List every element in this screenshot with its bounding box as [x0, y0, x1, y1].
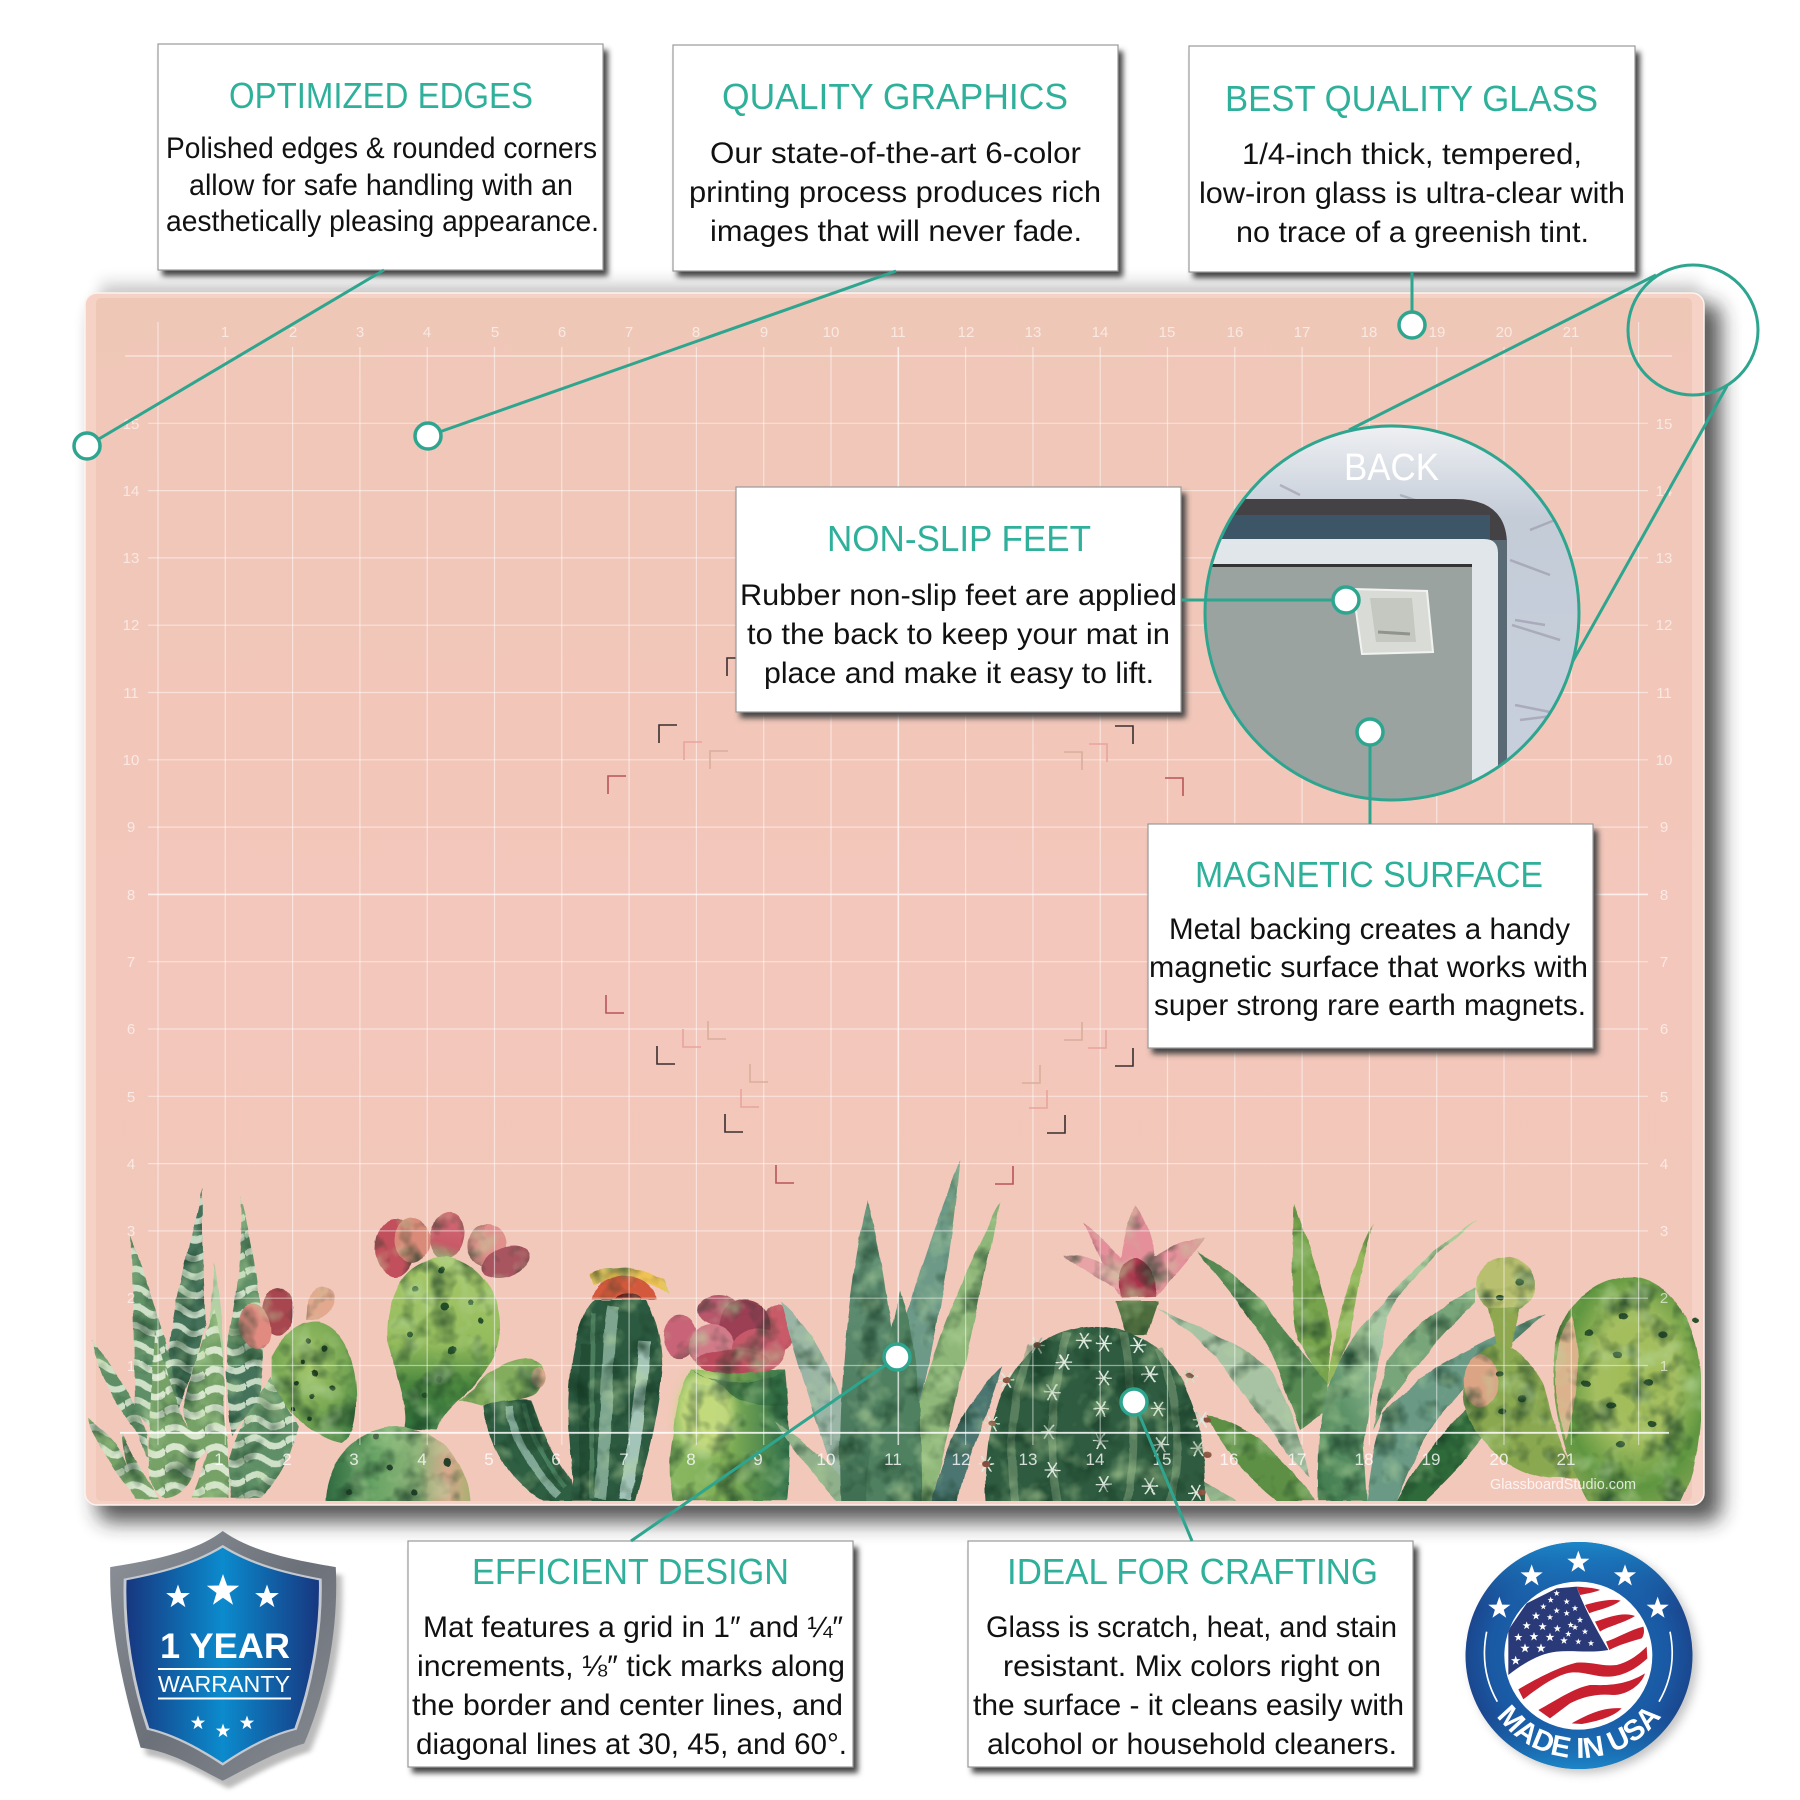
ruler numbers left: 5 — [127, 1089, 135, 1106]
ruler numbers top: 2 — [289, 324, 297, 341]
callout dot: edges — [74, 433, 100, 459]
panel: efficient design — [408, 1541, 858, 1773]
ruler numbers bottom: 16 — [1220, 1450, 1238, 1469]
ruler numbers top: 21 — [1563, 324, 1579, 341]
stars — [166, 1574, 279, 1737]
ruler numbers right: 15 — [1656, 416, 1672, 433]
magnifier connector lines — [1349, 275, 1727, 668]
white frame — [1200, 539, 1498, 810]
inset: back of the mat photo — [1200, 420, 1590, 814]
ruler numbers right: 11 — [1656, 685, 1672, 702]
body text: Glass is scratch, heat, and stain — [986, 1611, 1397, 1644]
connector lines from panels to dots — [87, 270, 1412, 1541]
aloe centre left leaves — [775, 1200, 892, 1501]
ruler numbers right — [1656, 416, 1672, 1375]
website credit: GlassboardStudio.com — [1490, 1476, 1636, 1493]
body text: Metal backing creates a handy — [1169, 913, 1570, 946]
zebra haworthia — [88, 1188, 263, 1498]
ruler numbers bottom: 5 — [484, 1450, 494, 1469]
curved cactus arm — [458, 1358, 575, 1501]
heading: EFFICIENT DESIGN — [472, 1551, 789, 1592]
ruler numbers top: 18 — [1361, 324, 1377, 341]
ruler numbers bottom: 10 — [817, 1450, 835, 1469]
body text — [1149, 913, 1588, 1022]
middle group: curved, column and pink-topped cacti — [458, 1268, 796, 1501]
right prickly pear — [1464, 1257, 1701, 1503]
ruler numbers left: 1 — [127, 1358, 135, 1375]
body text — [166, 132, 599, 238]
small prickly pear — [234, 1287, 357, 1443]
body text: allow for safe handling with an — [189, 169, 573, 202]
heading: BEST QUALITY GLASS — [1225, 78, 1598, 119]
ruler numbers top: 4 — [423, 324, 431, 341]
shield shape — [110, 1531, 336, 1781]
ruler numbers right: 4 — [1660, 1156, 1668, 1173]
ruler numbers right: 1 — [1660, 1358, 1668, 1375]
ruler numbers bottom: 18 — [1355, 1450, 1373, 1469]
ruler numbers left: 14 — [123, 483, 139, 500]
callout dot: graphics — [415, 423, 441, 449]
ruler numbers left: 9 — [127, 819, 135, 836]
ruler numbers top: 16 — [1227, 324, 1243, 341]
ruler numbers top: 17 — [1294, 324, 1310, 341]
ruler numbers bottom: 21 — [1557, 1450, 1575, 1469]
body text — [973, 1611, 1404, 1761]
clear rubber foot — [1353, 589, 1433, 654]
stars — [1488, 1551, 1669, 1618]
panel: quality graphics — [673, 45, 1123, 277]
ruler numbers top: 15 — [1159, 324, 1175, 341]
body text: diagonal lines at 30, 45, and 60°. — [416, 1728, 847, 1761]
ruler numbers right: 8 — [1660, 887, 1668, 904]
ruler numbers right: 7 — [1660, 954, 1668, 971]
ruler numbers right: 9 — [1660, 819, 1668, 836]
body text — [740, 579, 1177, 690]
body text: to the back to keep your mat in — [747, 618, 1170, 651]
body text: Mat features a grid in 1″ and ¼″ — [423, 1611, 843, 1644]
body text: Rubber non-slip feet are applied — [740, 579, 1177, 612]
lower pad — [325, 1427, 470, 1503]
ruler numbers bottom: 2 — [282, 1450, 292, 1469]
side arcs — [1484, 1632, 1672, 1702]
ruler numbers right: 5 — [1660, 1089, 1668, 1106]
heading: MAGNETIC SURFACE — [1195, 854, 1543, 895]
body text: place and make it easy to lift. — [764, 657, 1154, 690]
ruler numbers right: 13 — [1656, 550, 1672, 567]
ruler numbers right: 10 — [1656, 752, 1672, 769]
right plants — [978, 1206, 1701, 1503]
ruler numbers left: 11 — [123, 685, 139, 702]
flag and stars, drawn in crop space — [1484, 1551, 1672, 1730]
large aloe — [1157, 1203, 1546, 1502]
cactus illustration row — [88, 1160, 1701, 1503]
ruler numbers top: 3 — [356, 324, 364, 341]
pink-topped cactus — [663, 1295, 796, 1501]
ruler numbers bottom: 9 — [753, 1450, 763, 1469]
column cactus — [568, 1268, 668, 1501]
ruler numbers bottom: 20 — [1490, 1450, 1508, 1469]
body text: low-iron glass is ultra-clear with — [1199, 177, 1625, 210]
panel: optimized edges — [158, 44, 608, 276]
ruler numbers right: 6 — [1660, 1021, 1668, 1038]
ruler numbers bottom: 7 — [619, 1450, 629, 1469]
ruler numbers bottom: 8 — [686, 1450, 696, 1469]
ruler numbers top: 6 — [558, 324, 566, 341]
ruler numbers bottom: 1 — [214, 1450, 224, 1469]
magnifier ring on board corner — [1628, 265, 1758, 395]
body text — [689, 137, 1101, 248]
ruler numbers bottom: 14 — [1086, 1450, 1104, 1469]
body text: magnetic surface that works with — [1149, 951, 1588, 984]
ruler numbers bottom — [214, 1450, 1575, 1469]
badge: made in usa — [1466, 1542, 1702, 1778]
callout dot: glass — [1399, 312, 1425, 338]
panel: best quality glass — [1189, 46, 1640, 278]
ruler numbers top: 1 — [221, 324, 229, 341]
body text: super strong rare earth magnets. — [1154, 989, 1586, 1022]
ruler numbers top: 7 — [625, 324, 633, 341]
body text: aesthetically pleasing appearance. — [166, 205, 599, 238]
label: back: BACK — [1344, 447, 1439, 489]
body text: the surface - it cleans easily with — [973, 1689, 1404, 1722]
body text: Polished edges & rounded corners — [166, 132, 597, 165]
ruler numbers bottom: 17 — [1288, 1450, 1306, 1469]
badge: 1 year warranty: WARRANTY — [158, 1671, 290, 1697]
ruler numbers bottom: 11 — [884, 1450, 902, 1469]
body text: increments, ⅛″ tick marks along — [417, 1650, 845, 1683]
body text: resistant. Mix colors right on — [1003, 1650, 1381, 1683]
flag — [1508, 1587, 1647, 1724]
tall prickly pear body — [325, 1208, 535, 1503]
ruler numbers left: 6 — [127, 1021, 135, 1038]
ruler numbers top: 10 — [823, 324, 839, 341]
white disc — [1504, 1582, 1652, 1730]
callout dot: crafting — [1121, 1389, 1147, 1415]
ruler numbers top: 5 — [491, 324, 499, 341]
dark frame — [1234, 499, 1507, 540]
ruler numbers right: 14 — [1656, 483, 1672, 500]
glass cutting mat board — [85, 293, 1704, 1505]
body text: alcohol or household cleaners. — [987, 1728, 1397, 1761]
curved label: MADE IN USA — [1497, 1704, 1662, 1758]
grey metal backing — [1200, 564, 1472, 814]
ruler numbers bottom: 15 — [1153, 1450, 1171, 1469]
heading: QUALITY GRAPHICS — [722, 76, 1068, 117]
panel: magnetic surface — [1148, 824, 1598, 1054]
haworthia front-right leaf — [228, 1378, 298, 1498]
photo content — [1206, 428, 1578, 798]
ruler numbers left — [123, 416, 139, 1375]
ruler numbers left: 2 — [127, 1290, 135, 1307]
heading: IDEAL FOR CRAFTING — [1007, 1551, 1378, 1592]
ruler numbers left: 4 — [127, 1156, 135, 1173]
ruler numbers bottom: 12 — [952, 1450, 970, 1469]
ruler numbers top: 11 — [890, 324, 906, 341]
callout dot: magnetic — [1357, 719, 1383, 745]
ruler numbers top: 9 — [760, 324, 768, 341]
ruler numbers right: 2 — [1660, 1290, 1668, 1307]
ruler numbers right: 3 — [1660, 1223, 1668, 1240]
ruler numbers top: 12 — [958, 324, 974, 341]
ruler numbers bottom: 6 — [551, 1450, 561, 1469]
ruler numbers top — [221, 324, 1579, 341]
board shadow — [97, 280, 1721, 1522]
ruler numbers left: 15 — [123, 416, 139, 433]
aloe centre right leaves — [866, 1160, 1002, 1503]
ruler numbers left: 8 — [127, 887, 135, 904]
ruler numbers bottom: 13 — [1019, 1450, 1037, 1469]
ruler numbers right: 12 — [1656, 617, 1672, 634]
body text: 1/4-inch thick, tempered, — [1242, 138, 1582, 171]
body text: images that will never fade. — [710, 215, 1082, 248]
badge text: 1 YEAR — [160, 1627, 290, 1666]
ruler numbers left: 7 — [127, 954, 135, 971]
body text: no trace of a greenish tint. — [1236, 216, 1589, 249]
ruler numbers left: 10 — [123, 752, 139, 769]
ruler numbers top: 14 — [1092, 324, 1108, 341]
body text — [1199, 138, 1625, 249]
body text — [412, 1611, 847, 1761]
ruler numbers top: 20 — [1496, 324, 1512, 341]
outer disc — [1466, 1542, 1692, 1769]
flowering barrel cactus — [978, 1206, 1211, 1503]
diagonal corner marks — [606, 658, 1183, 1184]
ruler numbers top: 13 — [1025, 324, 1041, 341]
callout dot: efficient — [884, 1344, 910, 1370]
panel: ideal for crafting — [968, 1541, 1418, 1773]
measurement grid — [120, 322, 1672, 1445]
badge: 1 year warranty — [110, 1531, 342, 1789]
ruler numbers bottom: 4 — [417, 1450, 427, 1469]
ruler numbers left: 3 — [127, 1223, 135, 1240]
ruler numbers left: 12 — [123, 617, 139, 634]
ruler numbers top: 8 — [692, 324, 700, 341]
panel: non-slip feet — [736, 487, 1186, 718]
body text: printing process produces rich — [689, 176, 1101, 209]
ruler numbers bottom: 3 — [349, 1450, 359, 1469]
inset ring — [1205, 426, 1579, 800]
ruler numbers top: 19 — [1429, 324, 1445, 341]
left group: haworthia and small prickly pear — [88, 1188, 357, 1498]
heading: NON-SLIP FEET — [827, 518, 1091, 559]
ruler numbers left: 13 — [123, 550, 139, 567]
pink mat surface — [96, 298, 1692, 1501]
body text: Our state-of-the-art 6-color — [710, 137, 1081, 170]
callout dot: feet — [1333, 587, 1359, 613]
heading: OPTIMIZED EDGES — [229, 75, 533, 116]
body text: the border and center lines, and — [412, 1689, 843, 1722]
ruler numbers bottom: 19 — [1422, 1450, 1440, 1469]
glass edge — [85, 293, 1704, 1505]
